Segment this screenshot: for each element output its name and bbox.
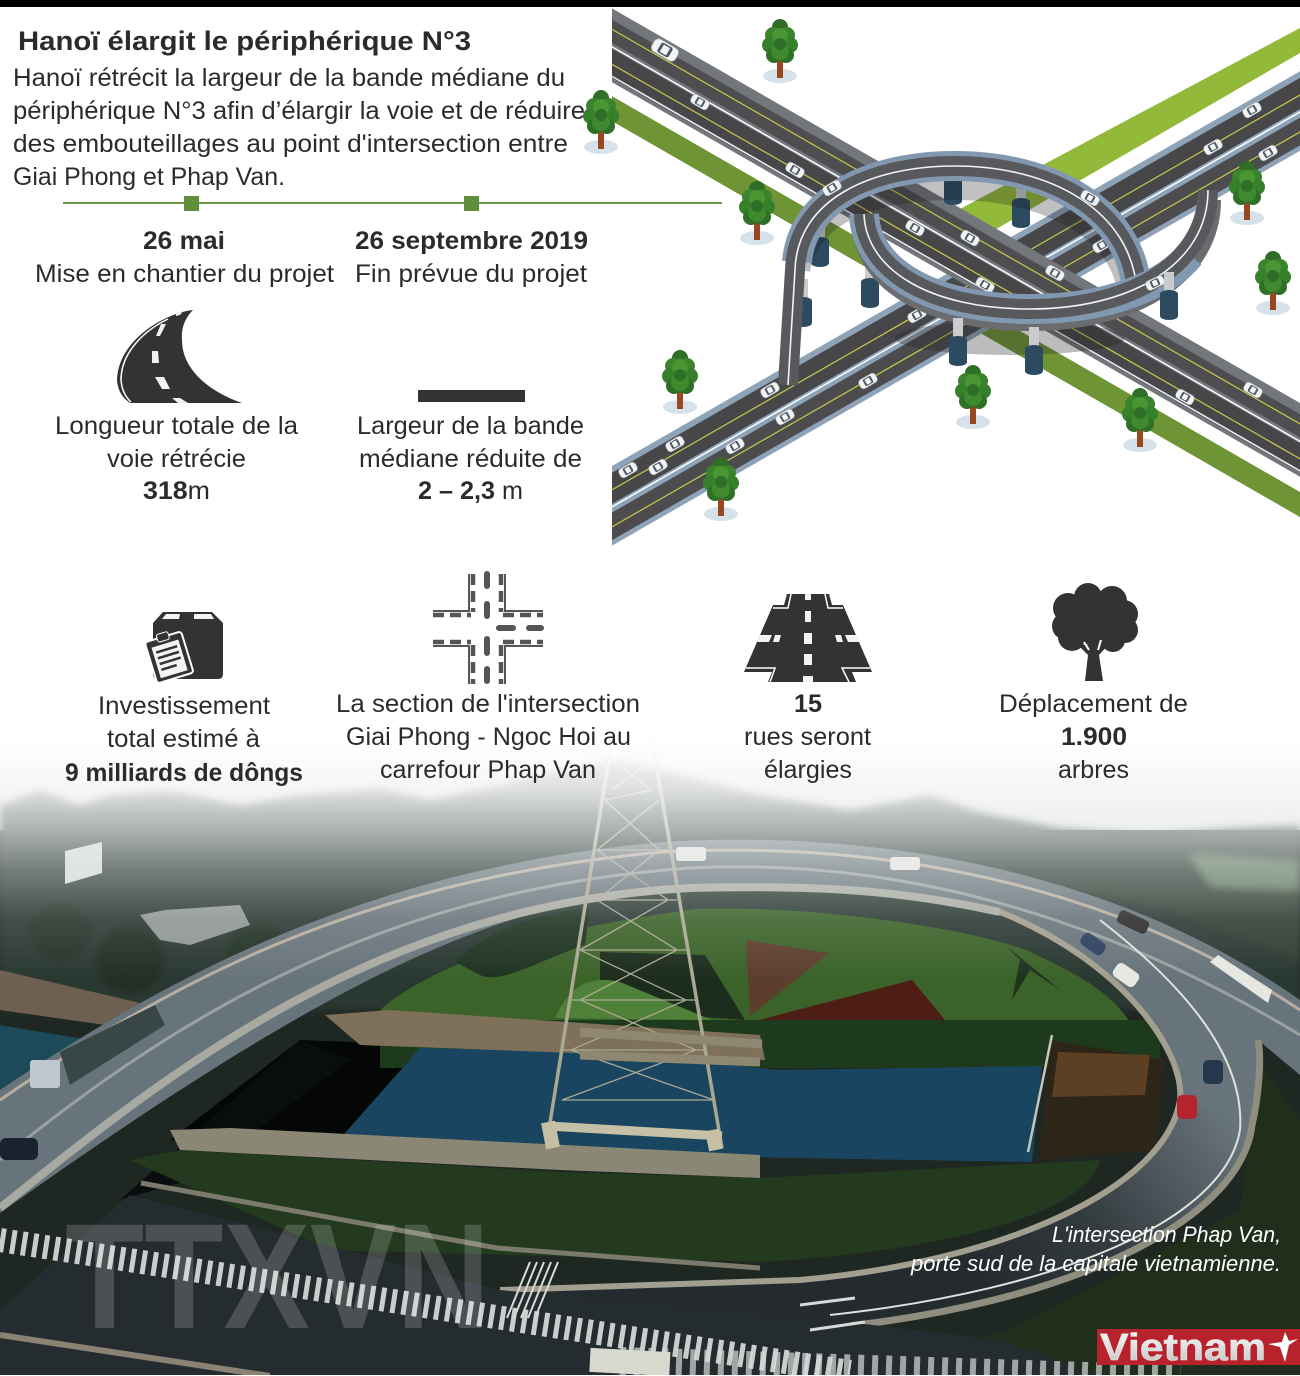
stat: investment: total estimé à: [107, 725, 260, 753]
icon: curved road: [117, 310, 242, 403]
green strip northwest to southeast: [610, 95, 1300, 517]
stat: trees relocated: Déplacement de: [999, 690, 1188, 718]
stat: median width: médiane réduite de: [359, 445, 582, 473]
lawn with wedges: [380, 908, 1128, 1020]
stat: investment: 9 milliards de dôngs: [65, 759, 303, 787]
end date: 26 septembre 2019: [355, 227, 588, 255]
bank strips: [325, 1010, 765, 1060]
trees: [662, 19, 1291, 521]
icon: median bar: [418, 390, 525, 402]
pillars in front of the ramps: [949, 272, 1178, 375]
stat: median width: 2 – 2,3 m: [418, 477, 523, 505]
dark shadow under the bridge: [170, 1040, 402, 1140]
stat: section of the intersection: La section de l'intersection: [336, 690, 640, 718]
tree overlapping the diagram edge: [583, 90, 619, 154]
tree line: [0, 760, 1300, 1010]
background photo: Phap Van intersection: [0, 756, 1300, 1375]
pillars behind the ramps: [802, 181, 1030, 327]
road northwest to southeast: [612, 8, 1300, 477]
stat: length: voie rétrécie: [107, 445, 246, 473]
top black bar: [0, 0, 1300, 7]
lower lawn: [130, 1150, 1100, 1262]
stat: length: [55, 412, 298, 505]
start date: Mise en chantier du projet: [35, 260, 334, 288]
photo caption: L'intersection Phap Van,: [1052, 1222, 1281, 1247]
shadows cast on the roads: [800, 190, 1125, 355]
icon: box and clipboard: [144, 612, 223, 684]
title: Hanoï élargit le périphérique N°3: [18, 26, 471, 56]
photo caption: porte sud de la capitale vietnamienne.: [910, 1251, 1281, 1276]
fog overlay: [0, 640, 1300, 961]
stat: length: Longueur totale de la: [55, 412, 298, 440]
end date: Fin prévue du projet: [355, 260, 587, 288]
left bank and water: [0, 970, 140, 1025]
stat: trees relocated: 1.900: [1061, 723, 1127, 751]
icon: tree: [1052, 583, 1138, 681]
cars: [617, 37, 1279, 479]
bottom roads: [0, 1195, 1100, 1376]
transmission tower: [548, 740, 762, 1150]
stat: section of the intersection: Giai Phong - Ngoc Hoi au: [346, 723, 631, 751]
logo: Vietnam+: Vietnam: [1100, 1327, 1266, 1369]
diagram: isometric interchange: [612, 8, 1300, 546]
water: [330, 1048, 1042, 1162]
icon: crossroads: [433, 574, 543, 684]
start date: [35, 227, 334, 288]
stat: streets widened: [744, 690, 871, 784]
stat: trees relocated: [999, 690, 1188, 784]
stat: trees relocated: arbres: [1058, 756, 1129, 784]
stat: streets widened: 15: [794, 690, 822, 718]
intro paragraph: [13, 64, 585, 191]
elevated ramp: upper loop: [788, 166, 1137, 385]
stat: investment: Investissement: [98, 692, 270, 720]
stat: streets widened: rues seront: [744, 723, 871, 751]
intro paragraph: Giai Phong et Phap Van.: [13, 163, 285, 191]
stat: section of the intersection: [336, 690, 640, 784]
stat: investment: [65, 692, 303, 787]
timeline: [63, 196, 722, 211]
elevated ramp: lower loop: [864, 190, 1209, 319]
green strip southwest to northeast: [961, 28, 1300, 229]
stat: median width: Largeur de la bande: [357, 412, 584, 440]
stat: streets widened: élargies: [764, 756, 852, 784]
end date: [355, 227, 588, 288]
intro paragraph: des embouteillages au point d'intersection entre: [13, 130, 568, 158]
icon: straight road: [744, 594, 872, 682]
intro paragraph: Hanoï rétrécit la largeur de la bande médiane du: [13, 64, 565, 92]
watermark: TTXVN: [65, 1192, 490, 1360]
vehicles: [0, 847, 1272, 1160]
road southwest to northeast: [612, 71, 1300, 546]
right lawn: [820, 1060, 1300, 1376]
stat: length: 318m: [143, 477, 210, 505]
intro paragraph: périphérique N°3 afin d’élargir la voie et de réduire: [13, 97, 585, 125]
photo caption: [910, 1222, 1281, 1276]
stat: median width: [357, 412, 584, 505]
start date: 26 mai: [143, 227, 225, 255]
ring road: far bridge and loop: [0, 840, 1300, 1335]
stat: section of the intersection: carrefour Phap Van: [380, 756, 596, 784]
